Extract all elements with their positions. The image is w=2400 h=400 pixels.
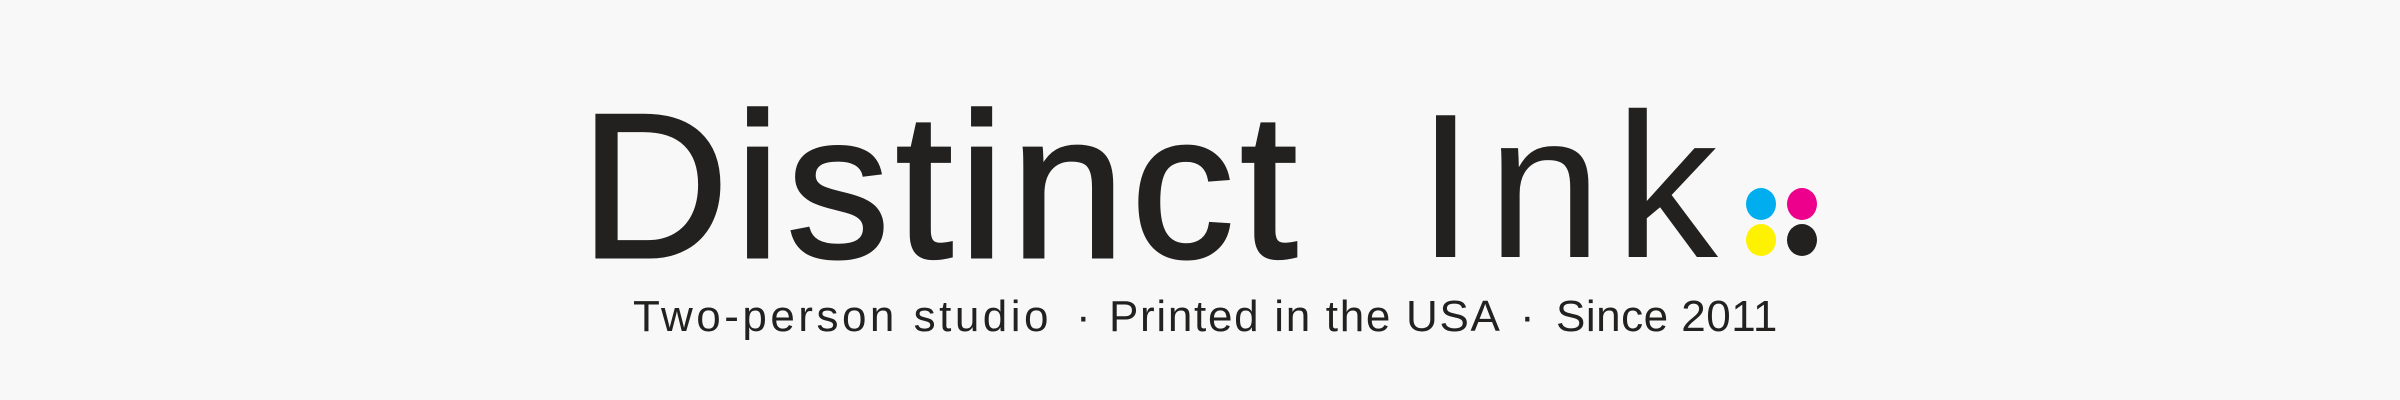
logo: Distinct Ink: [580, 71, 1817, 301]
tagline: [633, 292, 1778, 341]
wordmark: Distinct: Distinct: [580, 71, 1303, 301]
tagline: since 2011: Since 2011: [1556, 292, 1778, 341]
separator dot: ·: [1520, 292, 1535, 341]
wordmark: Ink: Ink: [1417, 71, 1731, 301]
separator dot: ·: [1076, 292, 1091, 341]
tagline: printed in the USA: Printed in the USA: [1109, 292, 1502, 341]
tagline: two-person studio: Two-person studio: [633, 292, 1052, 341]
icon: CMYK dots: [1746, 188, 1817, 256]
